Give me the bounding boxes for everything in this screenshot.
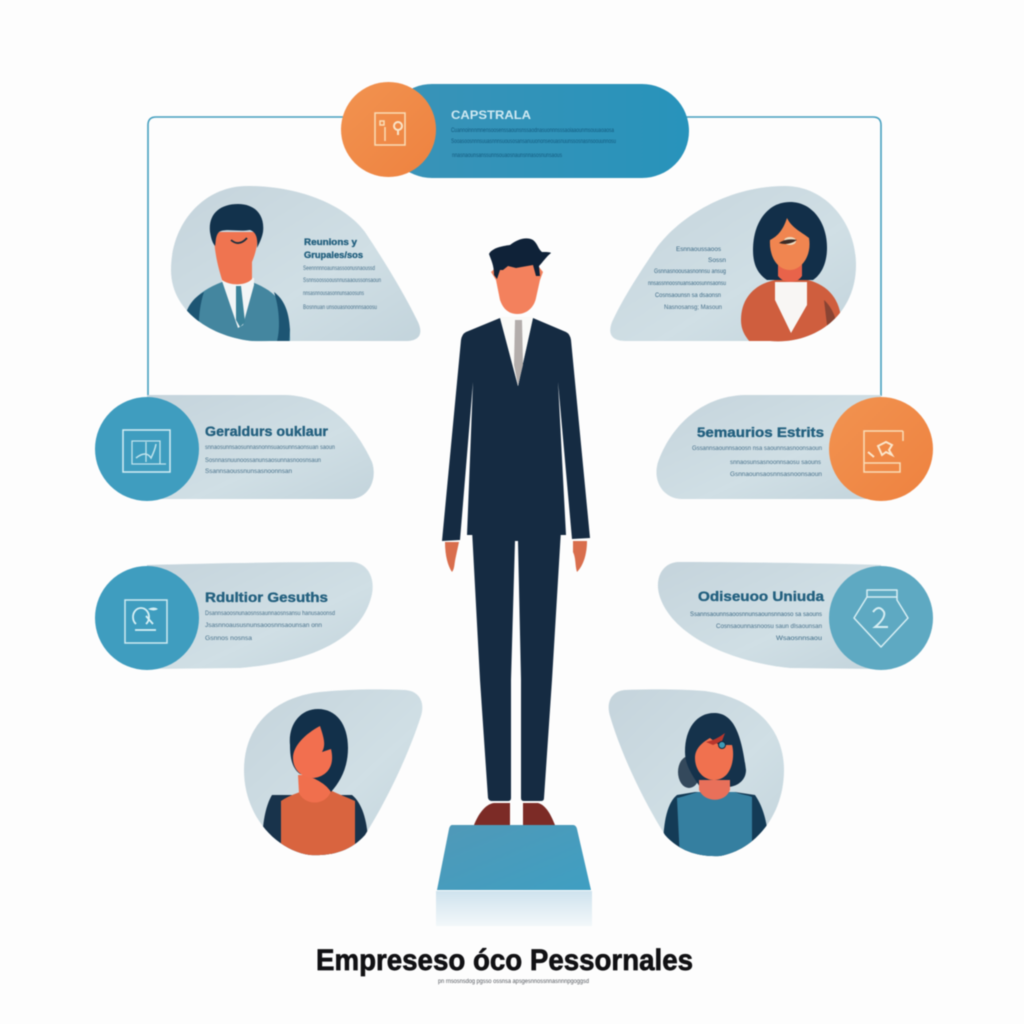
card text	[205, 445, 335, 475]
card shape	[147, 562, 373, 669]
card text: Gssannsaounnsaoosn nsa saounnsasnoonsaoun	[692, 446, 822, 452]
card shape	[610, 186, 856, 341]
card text	[648, 247, 726, 311]
card heading: 5emaurios Estrits	[697, 425, 824, 440]
connector lines	[148, 117, 881, 396]
hands	[445, 541, 587, 572]
panel: middle left card	[95, 395, 374, 501]
card text: Cosnsaounnasnoosu saun dlsaounsan	[716, 624, 822, 630]
icon: teal picture frame	[95, 397, 199, 501]
card text: Seennnnnoaunsassoonusnaoussd	[303, 266, 375, 272]
avatar: person in blue top with glasses	[663, 713, 768, 870]
pedestal	[436, 825, 592, 926]
card text: Gsnnos nosnsa	[205, 636, 253, 642]
banner text	[451, 128, 616, 159]
banner heading: CAPSTRALA	[451, 108, 531, 122]
card shape	[244, 689, 422, 855]
shoes	[474, 803, 555, 825]
card text: nnsasnnousasonnunsaoosuns	[303, 291, 364, 297]
card text	[205, 611, 335, 642]
card text: Ssannsaoussnunsasnoonnsan	[205, 469, 292, 475]
panel: top right profile	[610, 186, 856, 342]
card text: nnsassnnoosnuansaoosunnsaonsu	[648, 281, 726, 287]
icon: teal framed symbol	[95, 566, 199, 670]
card text: Nasnosansg; Masoun	[664, 305, 722, 311]
pedestal block	[437, 825, 591, 890]
panel: middle right card	[656, 395, 933, 501]
card shape	[609, 689, 784, 856]
card text: snnaosunsasnoonnsaosu saouns	[730, 460, 821, 466]
avatar: woman in rust jacket	[741, 202, 841, 342]
panel: lower right card	[658, 562, 933, 670]
card text: Ssnnsoossoousnnusaaoussonsaoun	[303, 278, 381, 284]
card text: Dsannsaoosnunaosnssaunnaosnsansu hanusaoonsd	[205, 611, 335, 617]
shirt	[500, 317, 533, 386]
card shape	[656, 395, 881, 499]
banner text: Cuannoinnnmnensoosenssaounsnssaodnasuonnnsssaoiaaounmsouuaoaosa	[451, 128, 615, 134]
suit jacket	[442, 318, 590, 541]
card text: Ssannsaounnsaoosnnunsaounsnnaoso sa saouns	[690, 612, 822, 618]
card heading: Grupales/sos	[304, 250, 363, 260]
avatar: man in teal jacket	[183, 204, 290, 341]
card heading: Rdultior Gesuths	[205, 590, 328, 605]
panel: top banner	[341, 82, 689, 178]
card shape	[147, 395, 374, 499]
card heading	[304, 237, 363, 260]
card text	[692, 446, 822, 478]
card text: Bosnnuan unsouasnoonnnsaoosu	[303, 305, 377, 311]
banner text: Sooasoosnnnsuuasnnnsuousosansanuuononseouasnuunssosnasnsoouunnosu	[451, 139, 616, 145]
panel: top left profile	[171, 186, 420, 341]
panel: bottom right profile	[609, 689, 784, 870]
face	[491, 262, 543, 314]
hair	[489, 238, 551, 279]
subtitle: pn rnsosnsdog pgsso ossnsa apsgesnnossnnasnnnpgoggsd	[438, 978, 589, 985]
icon: orange picture frame	[829, 397, 933, 501]
pedestal reflection	[436, 891, 592, 926]
card text: Wsaosnnsaou	[776, 636, 822, 642]
banner text: nnasnaounsanssunnsouaosnaunsnnasosnunsaous	[452, 153, 562, 159]
card text	[303, 266, 381, 311]
card text: Gsnnasnoousasnonnsu ansug	[654, 269, 726, 275]
card text: Sosnnasnuunoossanunsaosunnasnoosnsaun	[205, 458, 321, 464]
card text: Cosnsaounsn sa dsaonsn	[655, 293, 721, 299]
card text	[690, 612, 822, 642]
avatar: person in orange top	[262, 709, 368, 870]
card text: snnaosunnsaosunnasnonnsuaosunnsaonsuan saoun	[205, 445, 335, 451]
card text: Sossn	[708, 258, 726, 264]
card heading: Reunions y	[304, 237, 357, 247]
banner pill	[385, 84, 689, 178]
legs	[472, 530, 561, 801]
icon: orange document	[341, 82, 436, 177]
title: Empreseso óco Pessornales	[316, 944, 693, 977]
card heading: Geraldurs ouklaur	[205, 424, 329, 439]
card heading: Odiseuoo Uniuda	[698, 589, 825, 604]
card text: Esnnaoussaoos	[676, 247, 721, 253]
icon: teal diamond badge	[829, 566, 933, 670]
card text: Gsnnaounsaosnnsasnoonsaoun	[730, 472, 822, 478]
tie	[514, 320, 523, 385]
card text: Jsasnnoaususnunsaoosnnsaounsan onn	[205, 623, 322, 629]
panel: lower left card	[95, 562, 373, 670]
panel: bottom left profile	[244, 689, 422, 870]
card shape	[658, 562, 881, 669]
card shape	[171, 186, 420, 341]
central figure: man in suit	[442, 238, 590, 825]
